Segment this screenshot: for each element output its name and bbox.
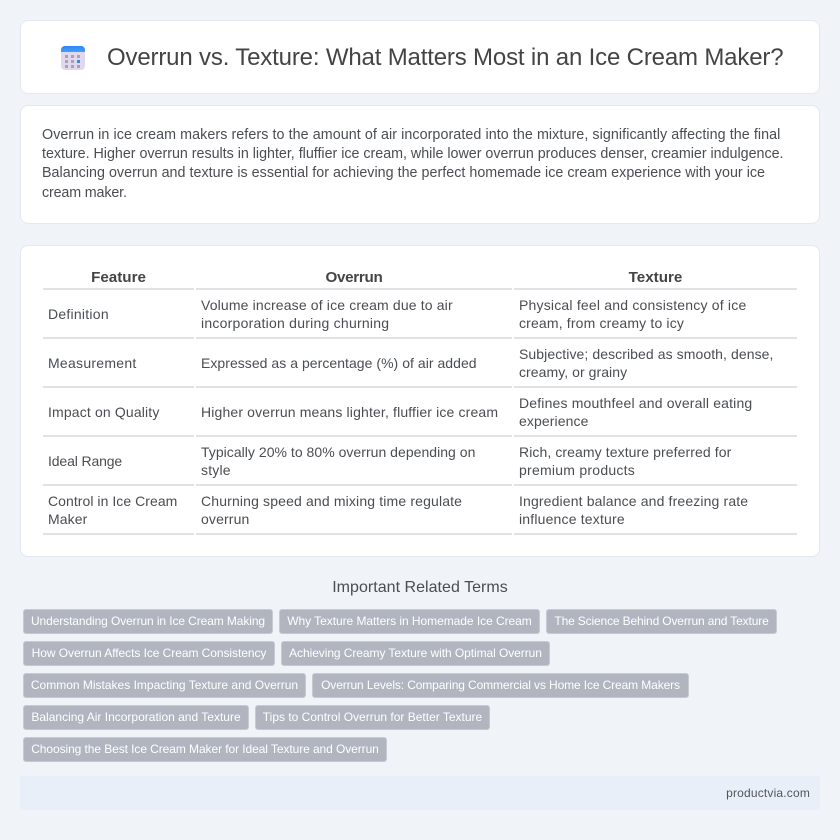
row: definition: Definition xyxy=(48,306,109,322)
tags: related terms: Why Texture Matters in Homemade Ice Cream xyxy=(287,614,532,628)
panel: comparison table: incorporation during churning xyxy=(201,315,389,331)
panel: comparison table: Physical feel and consistency of ice xyxy=(519,297,746,313)
tags: related terms: Common Mistakes Impacting Texture and Overrun xyxy=(31,678,298,692)
tags: related terms: Understanding Overrun in Ice Cream Making xyxy=(31,614,265,628)
icon: calendar xyxy=(61,46,85,70)
footer xyxy=(20,776,820,810)
panel: comparison table: overrun xyxy=(201,511,249,527)
panel: comparison table: Higher overrun means lighter, fluffier ice cream xyxy=(201,404,498,420)
tags: related terms: How Overrun Affects Ice Cream Consistency xyxy=(32,646,266,660)
panel: comparison table: style xyxy=(201,462,231,478)
table header: Feature xyxy=(91,269,146,286)
text block: introduction: Overrun in ice cream makers refers to the amount of air incorporated into the mixture, significantly affecting the final xyxy=(42,127,780,143)
row: control in ice cream maker xyxy=(48,493,177,527)
tags: related terms: Balancing Air Incorporation and Texture xyxy=(31,710,241,724)
row: impact on quality: Impact on Quality xyxy=(48,404,160,420)
tags: related terms: Choosing the Best Ice Cream Maker for Ideal Texture and Overrun xyxy=(31,742,379,756)
panel: comparison table: Churning speed and mixing time regulate xyxy=(201,493,462,509)
panel: introduction xyxy=(20,105,820,224)
panel: comparison table: creamy, or grainy xyxy=(519,364,627,380)
heading: related terms: Important Related Terms xyxy=(332,579,508,596)
footer source: productvia.com xyxy=(726,786,810,800)
panel: comparison table: Defines mouthfeel and overall eating xyxy=(519,395,752,411)
table header xyxy=(91,269,682,286)
panel: comparison table: influence texture xyxy=(519,511,625,527)
panel: comparison table xyxy=(20,245,820,557)
panel: comparison table: premium products xyxy=(519,462,635,478)
panel: comparison table: experience xyxy=(519,413,588,429)
text block: introduction: cream maker. xyxy=(42,185,127,201)
text block: introduction xyxy=(42,127,783,201)
panel: comparison table: Subjective; described as smooth, dense, xyxy=(519,346,773,362)
tags: related terms: The Science Behind Overrun and Texture xyxy=(554,614,769,628)
panel: comparison table: Rich, creamy texture preferred for xyxy=(519,444,731,460)
table header: Overrun xyxy=(326,269,382,286)
table header: Texture xyxy=(629,269,682,286)
row: measurement: Measurement xyxy=(48,355,137,371)
tags: related terms: Tips to Control Overrun for Better Texture xyxy=(263,710,482,724)
tags: related terms: Achieving Creamy Texture with Optimal Overrun xyxy=(289,646,542,660)
title: Overrun vs. Texture: What Matters Most in an Ice Cream Maker? xyxy=(107,44,783,71)
panel: comparison table: cream, from creamy to icy xyxy=(519,315,684,331)
text block: introduction: Balancing overrun and texture is essential for achieving the perfect homemade ice cream experience with your ice xyxy=(42,165,765,181)
panel: comparison table: Typically 20% to 80% overrun depending on xyxy=(201,444,475,460)
panel: title xyxy=(20,20,820,94)
row: ideal range: Ideal Range xyxy=(48,453,122,469)
tags: related terms: Overrun Levels: Comparing Commercial vs Home Ice Cream Makers xyxy=(321,678,680,692)
panel: comparison table: Expressed as a percentage (%) of air added xyxy=(201,355,477,371)
panel: comparison table: Volume increase of ice cream due to air xyxy=(201,297,453,313)
panel: comparison table: Ingredient balance and freezing rate xyxy=(519,493,748,509)
row: control in ice cream maker: Control in Ice Cream xyxy=(48,493,177,509)
text block: introduction: texture. Higher overrun results in lighter, fluffier ice cream, while lower overrun produces denser, creamier indulgence. xyxy=(42,146,783,162)
row: control in ice cream maker: Maker xyxy=(48,511,87,527)
